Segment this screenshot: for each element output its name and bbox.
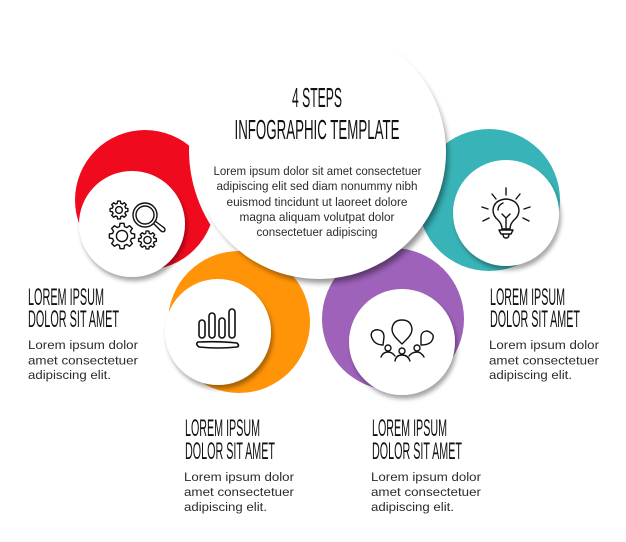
step 1 text: amet consectetuer (28, 354, 138, 368)
step 3 text: LOREM IPSUM (372, 415, 447, 442)
icon: light bulb (482, 188, 530, 238)
step 2 text (184, 415, 294, 514)
central text block: consectetuer adipiscing (256, 225, 378, 239)
central text block: magna aliquam volutpat dolor (240, 210, 394, 224)
step 1 text: Lorem ipsum dolor (28, 338, 138, 352)
panel: purple step circle (322, 248, 464, 395)
step 2 text: Lorem ipsum dolor (184, 470, 294, 484)
title (234, 82, 400, 145)
step 2 text: DOLOR SIT AMET (185, 438, 275, 465)
icon: bar chart (197, 309, 238, 348)
step 1 text (28, 284, 138, 382)
central text block (214, 164, 422, 239)
step 4 text (489, 284, 599, 382)
panel: orange step circle (165, 251, 310, 393)
purple step white disc (349, 289, 455, 395)
step 2 text: adipiscing elit. (184, 500, 267, 514)
orange step white disc (165, 279, 271, 385)
step 2 text: amet consectetuer (184, 485, 294, 499)
icon: gears and magnifier (109, 201, 165, 249)
step 3 text: adipiscing elit. (371, 500, 454, 514)
step 4 text: adipiscing elit. (489, 368, 572, 382)
central text block: adipiscing elit sed diam nonummy nibh (216, 179, 418, 193)
text: INFOGRAPHIC TEMPLATE (234, 114, 400, 145)
teal step white disc (453, 160, 559, 266)
icon: people with speech bubbles (371, 320, 433, 361)
step 3 text: amet consectetuer (371, 485, 481, 499)
step 2 text: LOREM IPSUM (185, 415, 260, 442)
panel: central circle (192, 25, 448, 283)
step 1 text: DOLOR SIT AMET (28, 306, 119, 333)
step 3 text: Lorem ipsum dolor (371, 470, 481, 484)
panel: red step circle (75, 9, 471, 291)
step 4 text: Lorem ipsum dolor (489, 338, 599, 352)
step 1 text: LOREM IPSUM (28, 284, 104, 311)
central text block: euismod tincidunt ut laoreet dolore (226, 195, 408, 209)
central text block: Lorem ipsum dolor sit amet consectetuer (214, 164, 422, 178)
step 1 text: adipiscing elit. (28, 368, 111, 382)
step 4 text: amet consectetuer (489, 354, 599, 368)
title: 4 STEPS (292, 82, 342, 113)
step 3 text: DOLOR SIT AMET (372, 438, 462, 465)
step 3 text (371, 415, 481, 514)
red step white disc (79, 171, 185, 277)
panel: teal step circle (418, 129, 560, 271)
